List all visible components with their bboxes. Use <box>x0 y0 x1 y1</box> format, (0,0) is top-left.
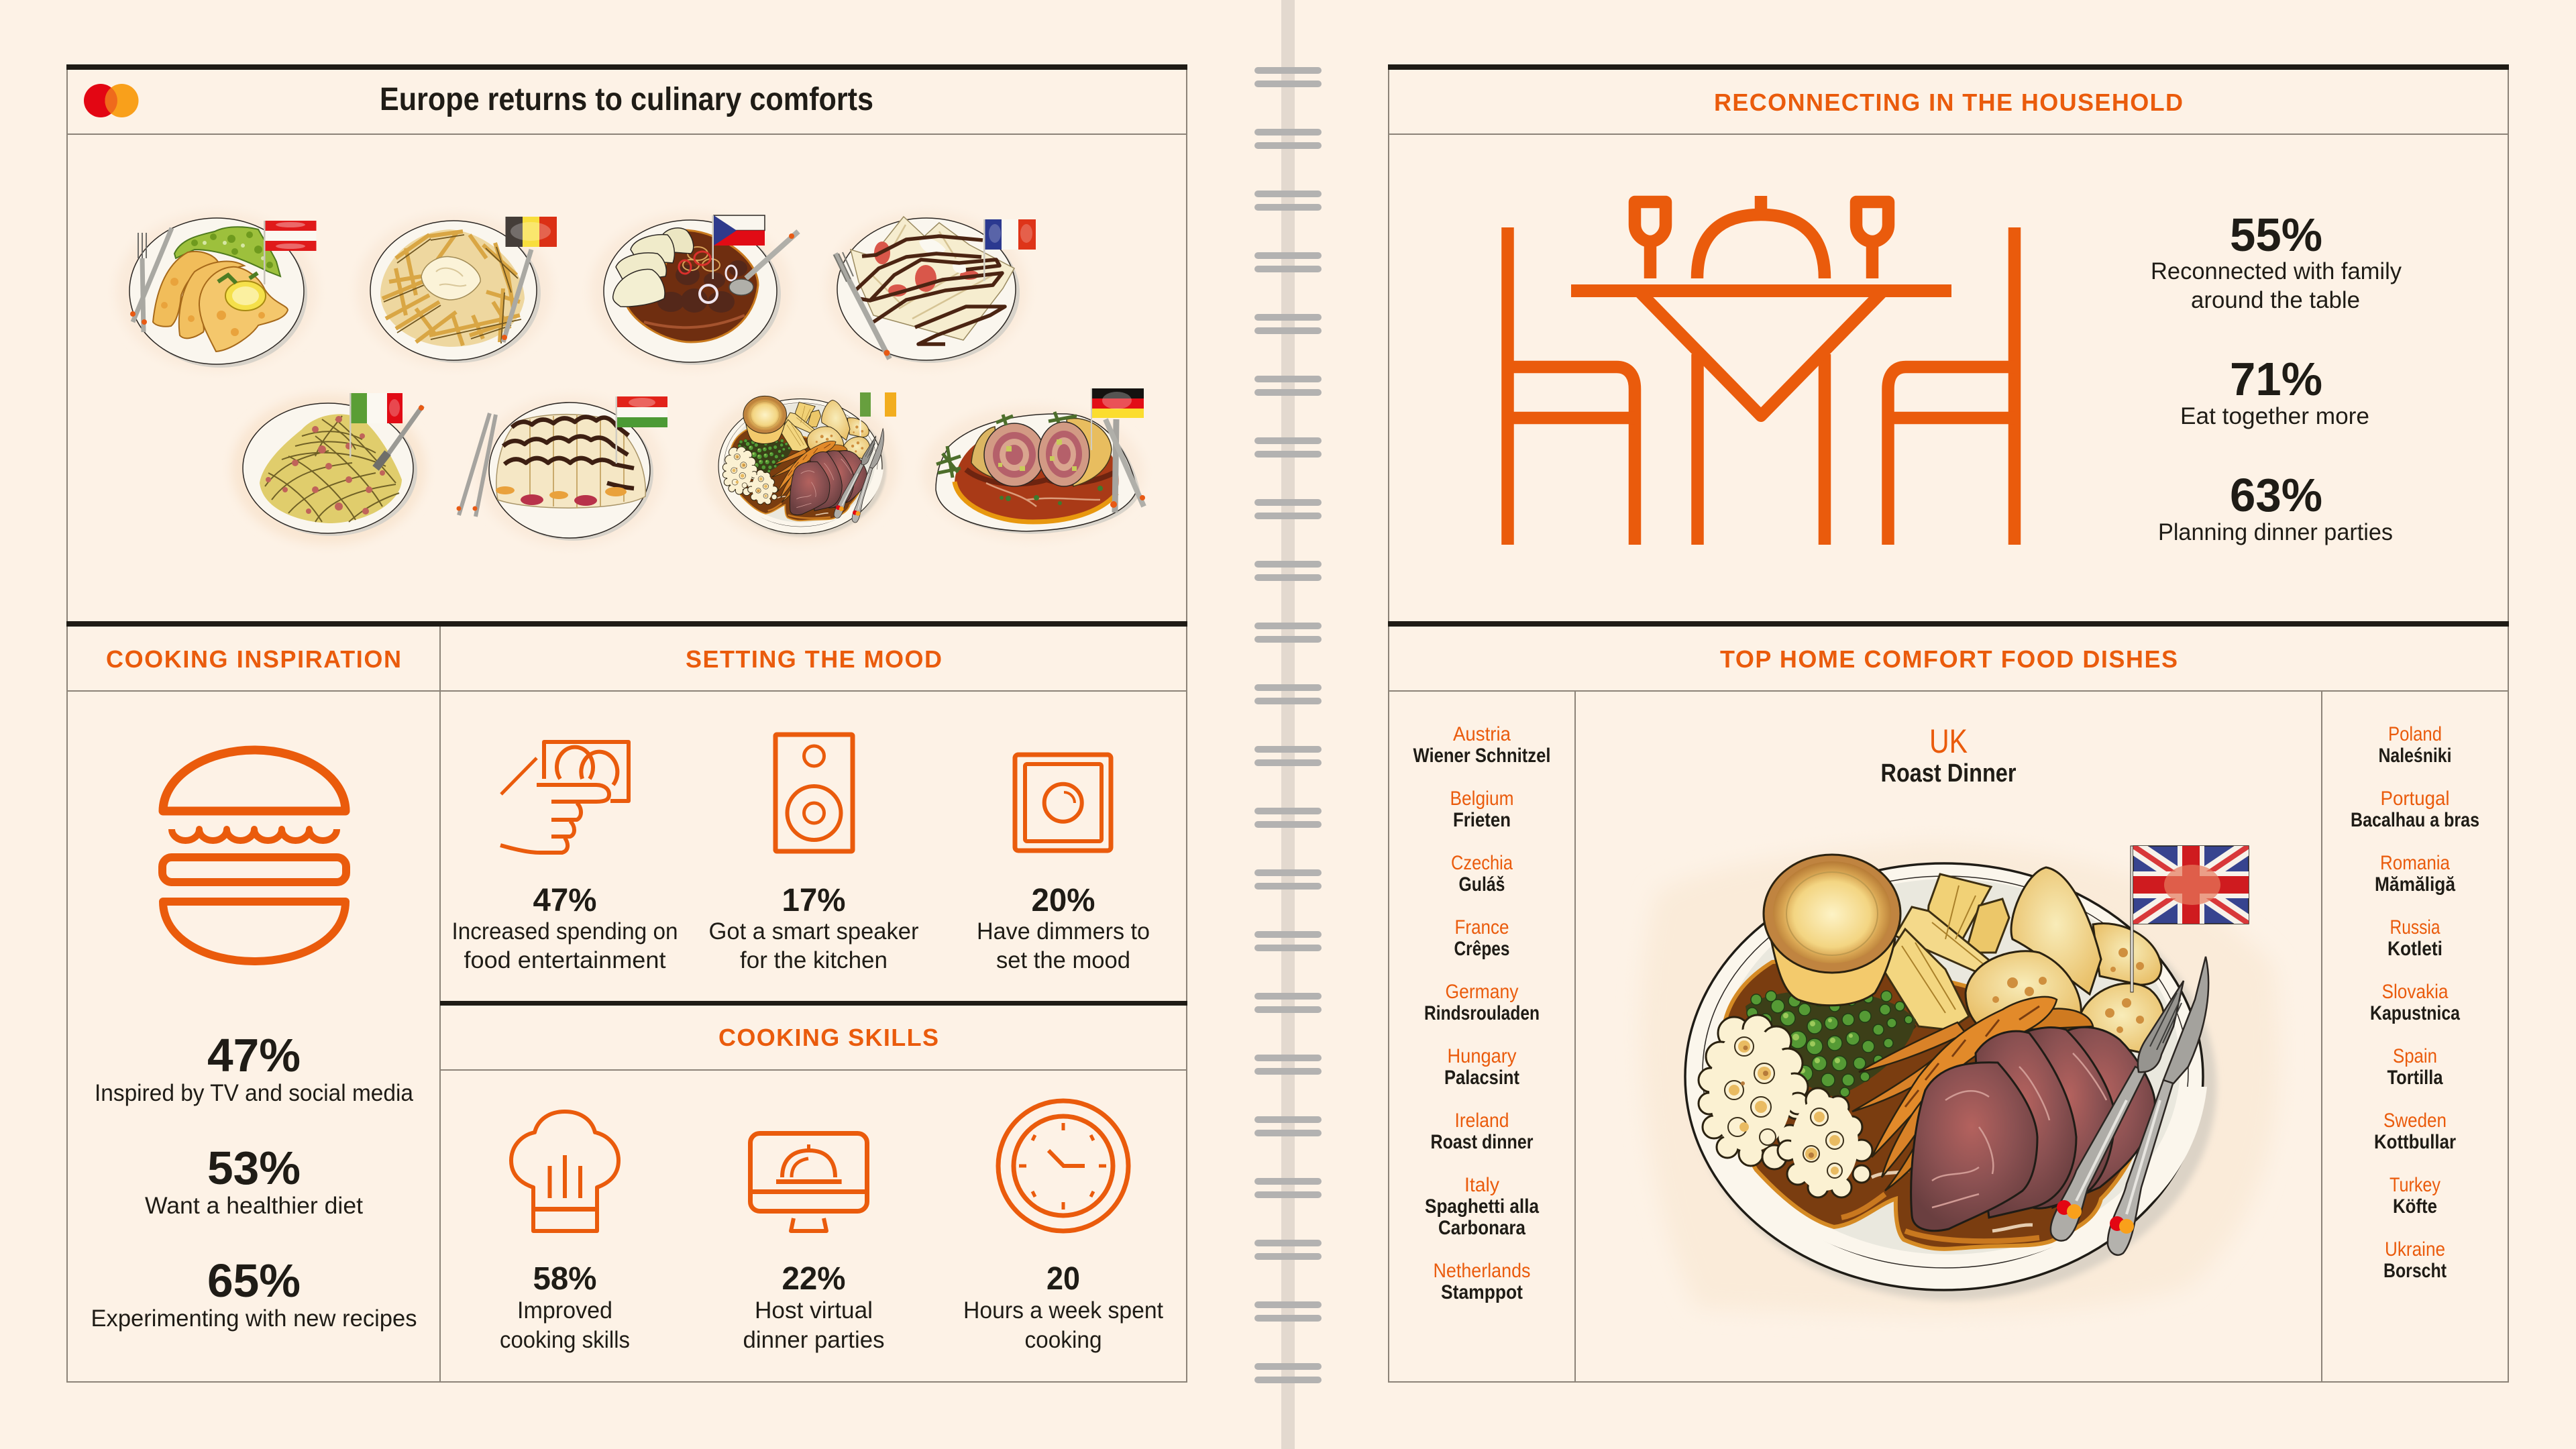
illustration: Germany rindsrouladen <box>922 388 1145 540</box>
roast potatoes <box>1966 867 2164 1055</box>
icon: UK flag <box>2131 846 2249 992</box>
list: countries A to N: Stamppot <box>1441 1281 1523 1303</box>
illustration: Belgium frieten <box>356 214 557 367</box>
stat: planning dinner parties <box>2158 469 2393 545</box>
list: countries A to N: Frieten <box>1453 809 1511 831</box>
list: countries A to N: Ireland <box>1454 1110 1509 1132</box>
icon: burger <box>162 750 346 961</box>
list: countries A to N: Guláš <box>1458 873 1505 896</box>
heading: UK roast dinner: UK <box>1929 722 1968 760</box>
stat: host virtual dinner parties: Host virtual <box>755 1297 873 1324</box>
stat: host virtual dinner parties: 22% <box>782 1261 845 1297</box>
list: countries A to N: Italy <box>1464 1174 1499 1196</box>
stat: experimenting with new recipes: 65% <box>207 1254 301 1307</box>
icon: clock <box>998 1101 1128 1231</box>
list: countries P to U: Kapustnica <box>2370 1002 2460 1024</box>
roast beef slices <box>1911 1027 2155 1231</box>
panel: right page frame <box>1388 64 2509 1383</box>
stat: inspired by TV and social media <box>95 1029 414 1106</box>
stat: want a healthier diet: Want a healthier diet <box>145 1193 363 1219</box>
list: countries P to U: Naleśniki <box>2379 745 2451 767</box>
heading: UK roast dinner: Roast Dinner <box>1881 759 2017 788</box>
stat: experimenting with new recipes <box>91 1254 417 1332</box>
list: countries A to N: Spaghetti alla <box>1425 1195 1539 1218</box>
stat: reconnected with family: Reconnected with family <box>2151 258 2402 284</box>
stat: eat together more: Eat together more <box>2180 403 2369 429</box>
list: countries P to U: Tortilla <box>2387 1067 2443 1089</box>
illustration: Czechia gulas <box>590 213 798 369</box>
heading: reconnecting in the household: RECONNECTING IN THE HOUSEHOLD <box>1714 89 2183 116</box>
stat: improved cooking skills <box>500 1261 630 1353</box>
illustration: Italy spaghetti carbonara <box>231 393 426 545</box>
stat: hours a week cooking <box>963 1261 1163 1353</box>
stat: planning dinner parties: 63% <box>2230 469 2322 521</box>
list: countries P to U <box>2351 723 2479 1282</box>
list: countries P to U: Sweden <box>2383 1110 2447 1132</box>
panel: left page frame <box>66 64 1187 1383</box>
parsnips <box>1881 874 2009 1036</box>
stat: host virtual dinner parties <box>743 1261 884 1353</box>
illustration: Ireland roast dinner <box>703 390 898 543</box>
stat: smart speaker: 17% <box>782 883 845 918</box>
stat: improved cooking skills: cooking skills <box>500 1327 630 1353</box>
stat: dimmers: 20% <box>1032 883 1095 918</box>
list: countries A to N: Austria <box>1453 723 1511 745</box>
stat: smart speaker: Got a smart speaker <box>708 918 919 945</box>
cutlery logos <box>2057 1200 2134 1234</box>
icon: speaker <box>775 735 853 851</box>
heading: cooking skills: COOKING SKILLS <box>718 1024 938 1051</box>
stat: host virtual dinner parties: dinner parties <box>743 1327 884 1353</box>
icon: hand holding card <box>500 742 629 853</box>
gravy <box>1725 961 2147 1249</box>
list: countries P to U: Borscht <box>2383 1260 2447 1282</box>
cutlery <box>2051 957 2208 1255</box>
list: countries P to U: Spain <box>2393 1045 2437 1067</box>
stat: reconnected with family: around the table <box>2191 287 2360 313</box>
list: countries A to N: Carbonara <box>1438 1217 1525 1239</box>
title: Europe returns to culinary comforts <box>380 82 873 117</box>
plate <box>1685 863 2216 1300</box>
icon: chef hat <box>511 1112 619 1231</box>
stat: hours a week cooking: 20 <box>1046 1261 1080 1297</box>
icon: dining table with chairs <box>1508 196 2015 545</box>
list: countries A to N: Netherlands <box>1433 1260 1531 1282</box>
list: countries P to U: Kottbullar <box>2374 1131 2456 1153</box>
list: countries P to U: Romania <box>2380 852 2450 874</box>
notebook spine with binder rings <box>1254 0 1322 1449</box>
list: countries A to N: Rindsrouladen <box>1424 1002 1540 1024</box>
stat: increased spending: 47% <box>533 883 597 918</box>
stat: smart speaker <box>708 883 919 973</box>
list: countries A to N <box>1413 723 1551 1303</box>
stat: want a healthier diet <box>145 1142 363 1219</box>
illustration: Austria wiener schnitzel <box>116 212 317 370</box>
list: countries P to U: Russia <box>2390 916 2440 938</box>
stat: inspired by TV and social media: Inspired by TV and social media <box>95 1080 414 1106</box>
list: countries P to U: Bacalhau a bras <box>2351 809 2479 831</box>
heading: setting the mood: SETTING THE MOOD <box>686 645 942 673</box>
stat: hours a week cooking: cooking <box>1025 1327 1102 1353</box>
yorkshire pudding <box>1764 855 1900 1006</box>
list: countries A to N: Czechia <box>1451 852 1513 874</box>
stat: dimmers <box>977 883 1150 973</box>
illustration: watercolour wash behind roast dinner <box>1641 842 2279 1315</box>
list: countries A to N: Roast dinner <box>1430 1131 1534 1153</box>
list: countries A to N: Wiener Schnitzel <box>1413 745 1551 767</box>
list: countries P to U: Ukraine <box>2385 1238 2445 1260</box>
stat: eat together more <box>2180 353 2369 429</box>
stat: increased spending: food entertainment <box>464 947 666 973</box>
icon: dimmer switch <box>1015 755 1111 851</box>
illustration: France crepes <box>826 212 1036 368</box>
list: countries P to U: Mămăligă <box>2375 873 2455 896</box>
stat: want a healthier diet: 53% <box>207 1142 301 1194</box>
list: countries A to N: Hungary <box>1448 1045 1516 1067</box>
stat: reconnected with family: 55% <box>2230 209 2322 261</box>
heading: UK roast dinner <box>1881 722 2017 788</box>
stat: increased spending <box>452 883 678 973</box>
stat: improved cooking skills: Improved <box>517 1297 612 1324</box>
list: countries A to N: Germany <box>1445 981 1519 1003</box>
stat: dimmers: set the mood <box>996 947 1130 973</box>
list: countries P to U: Kotleti <box>2387 938 2443 960</box>
stat: smart speaker: for the kitchen <box>740 947 888 973</box>
icon: monitor with cloche <box>750 1134 867 1231</box>
list: countries A to N: Crêpes <box>1454 938 1509 960</box>
illustration: Hungary palacsinta <box>456 396 667 546</box>
list: countries P to U: Poland <box>2388 723 2442 745</box>
stat: inspired by TV and social media: 47% <box>207 1029 301 1081</box>
illustration: UK roast dinner plate <box>1685 855 2216 1300</box>
list: countries P to U: Portugal <box>2380 788 2450 810</box>
stat: experimenting with new recipes: Experimenting with new recipes <box>91 1305 417 1332</box>
list: countries A to N: Palacsint <box>1444 1067 1519 1089</box>
stat: increased spending: Increased spending on <box>452 918 678 945</box>
stat: reconnected with family <box>2151 209 2402 313</box>
list: countries A to N: France <box>1454 916 1509 938</box>
mashed potato <box>1699 1015 1872 1197</box>
list: countries P to U: Slovakia <box>2381 981 2449 1003</box>
stat: eat together more: 71% <box>2230 353 2322 405</box>
list: countries A to N: Belgium <box>1450 788 1513 810</box>
peas <box>1746 990 1916 1097</box>
stat: improved cooking skills: 58% <box>533 1261 597 1297</box>
stat: planning dinner parties: Planning dinner parties <box>2158 519 2393 545</box>
heading: top home comfort food dishes: TOP HOME COMFORT FOOD DISHES <box>1720 645 2178 673</box>
stat: hours a week cooking: Hours a week spent <box>963 1297 1163 1324</box>
icon: Mastercard logo <box>84 84 138 117</box>
heading: cooking inspiration: COOKING INSPIRATION <box>106 645 401 673</box>
stat: dimmers: Have dimmers to <box>977 918 1150 945</box>
list: countries P to U: Turkey <box>2390 1174 2440 1196</box>
carrots <box>1852 997 2093 1191</box>
list: countries P to U: Köfte <box>2393 1195 2437 1218</box>
